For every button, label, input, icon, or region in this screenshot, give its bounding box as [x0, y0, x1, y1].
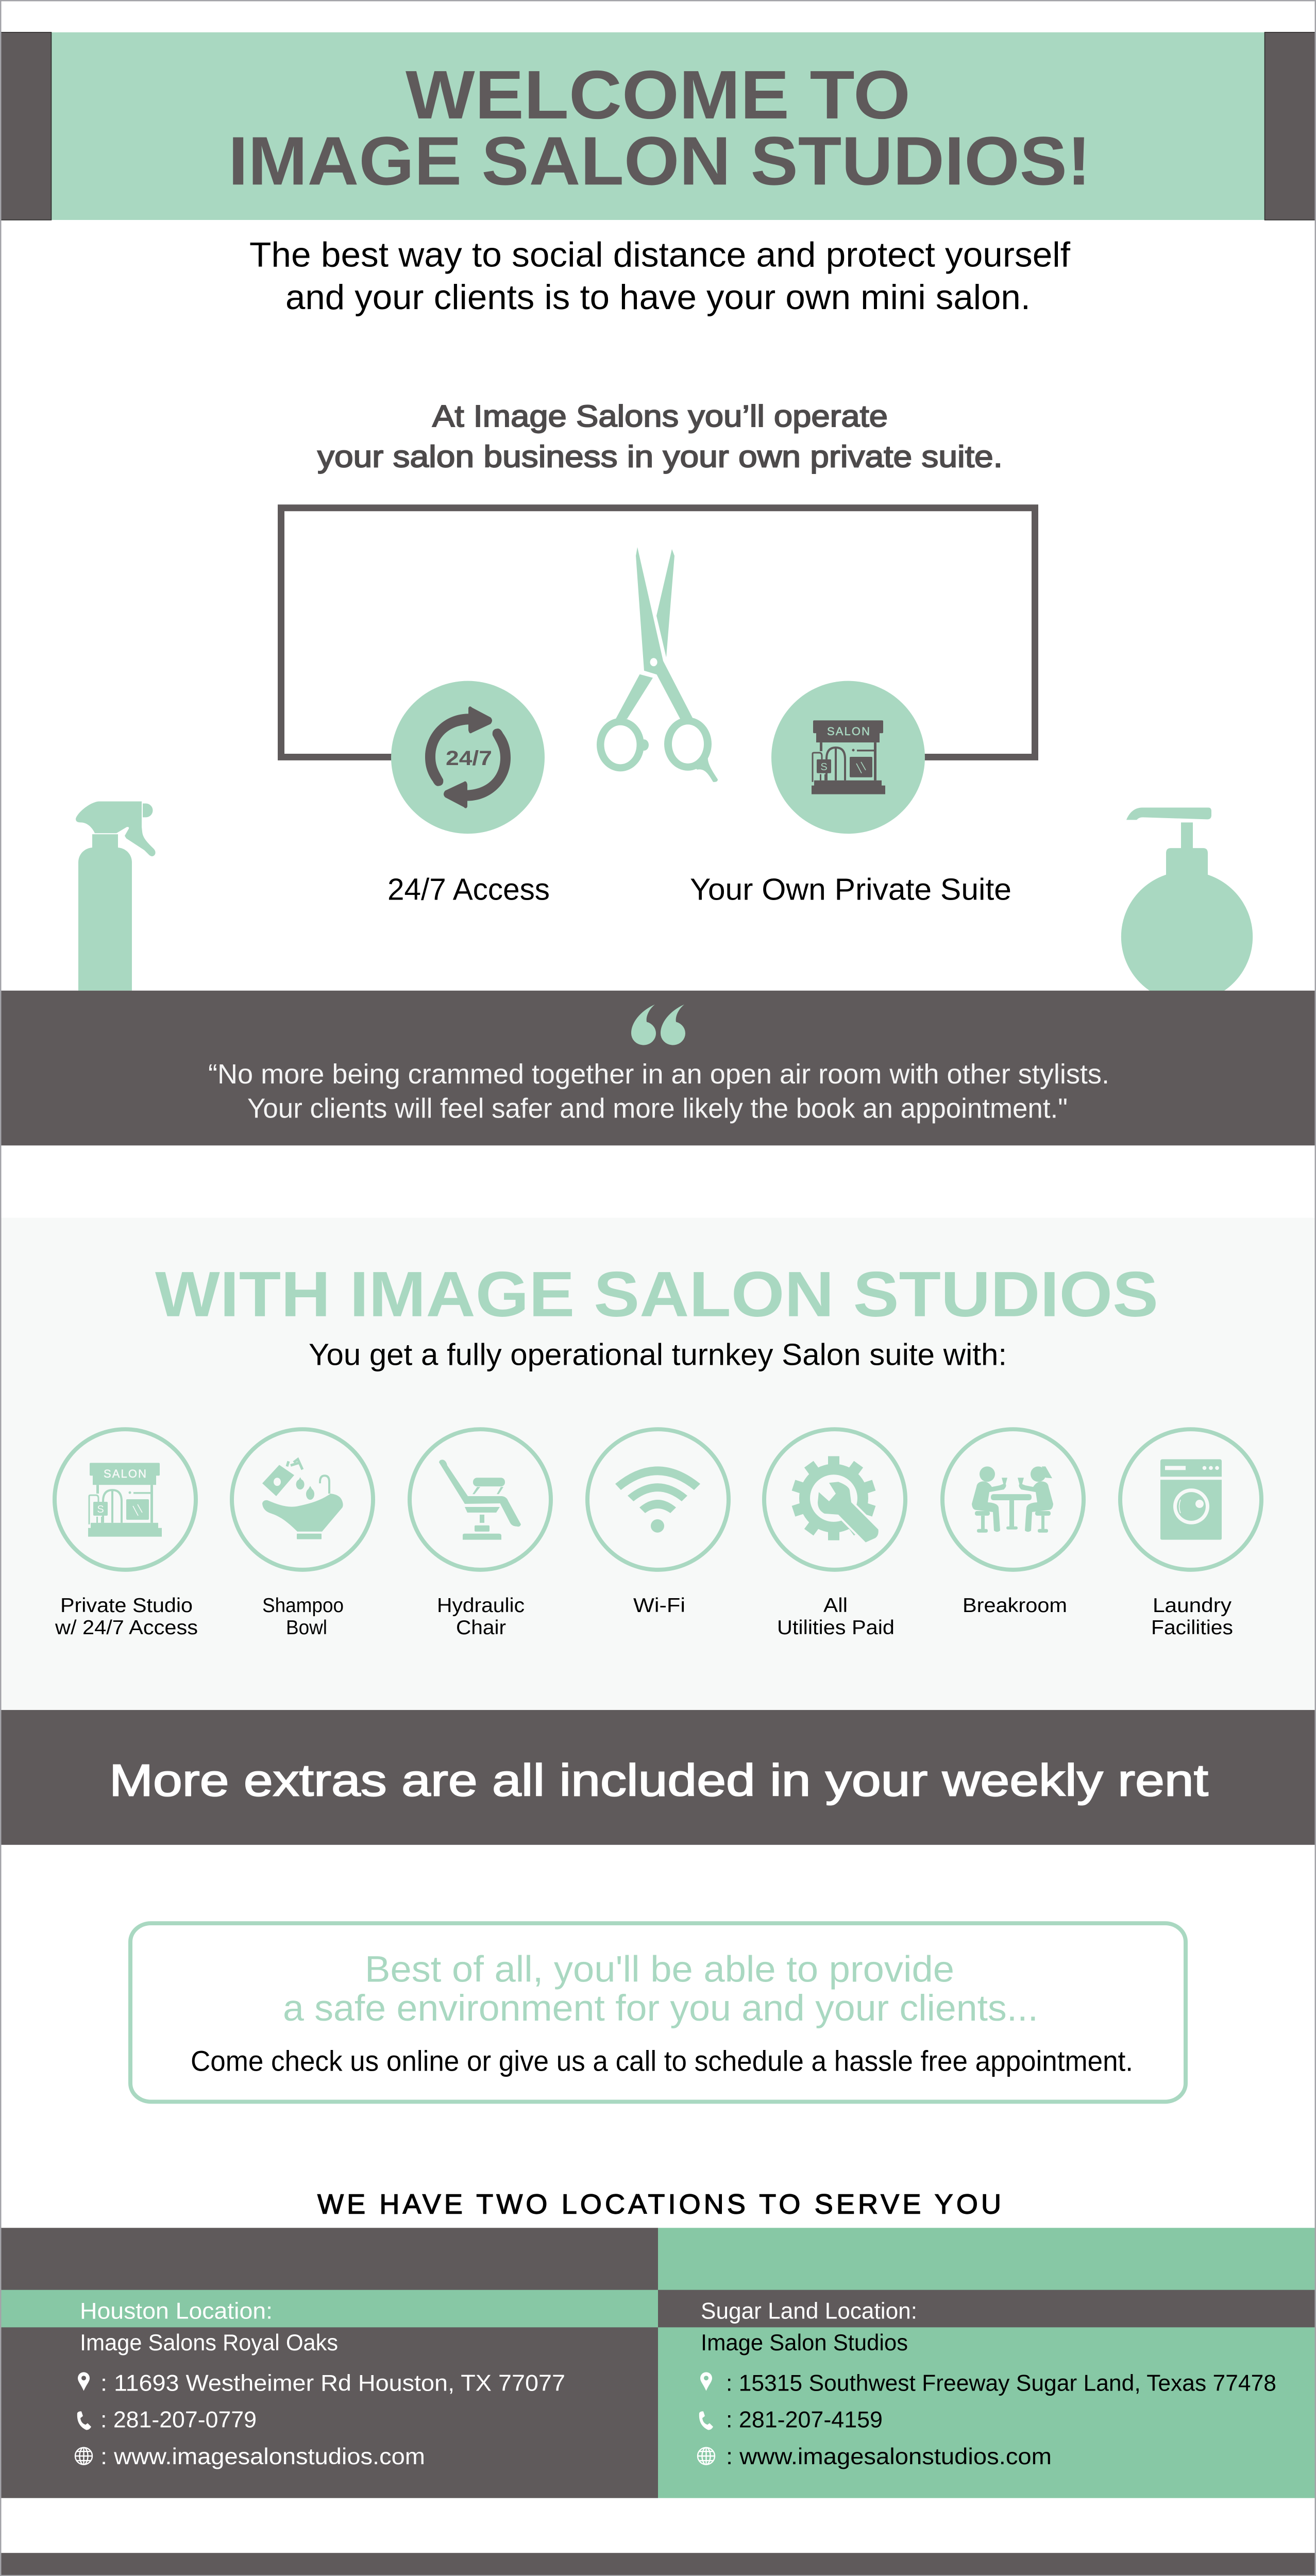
panel: sugar land location: : www.imagesalonstudios.com	[726, 2443, 1052, 2469]
amenity: hydraulic chair: Chair	[456, 1617, 506, 1639]
suite feature labels	[387, 872, 1011, 907]
title: IMAGE SALON STUDIOS!	[228, 123, 1091, 199]
amenity: shampoo bowl	[232, 1429, 373, 1639]
intro text: The best way to social distance and protect yourself	[249, 236, 1070, 274]
panel: sugar land location: : 15315 Southwest Freeway Sugar Land, Texas 77478	[726, 2370, 1276, 2396]
amenity: laundry facilities: Facilities	[1151, 1617, 1233, 1639]
amenity: hydraulic chair: Hydraulic	[437, 1595, 525, 1617]
panel: sugar land location	[658, 2228, 1316, 2498]
footer band	[0, 2553, 1316, 2575]
mirror frame	[281, 508, 1035, 757]
private suite heading	[317, 399, 1003, 474]
icon: quotation mark	[631, 1005, 685, 1045]
subheading: You get a fully operational turnkey Salon suite with:	[309, 1337, 1007, 1371]
icon: pin	[78, 2372, 90, 2391]
icon: phone	[699, 2411, 713, 2430]
amenity: private studio: SALON	[104, 1467, 146, 1480]
amenity: private studio: w/ 24/7 Access	[55, 1617, 198, 1639]
icon: private suite storefront: SALON	[827, 725, 870, 738]
amenity: private studio: S	[97, 1504, 104, 1515]
amenity: all utilities paid: All	[823, 1595, 848, 1617]
panel: houston location	[0, 2228, 658, 2498]
panel: houston location: : 11693 Westheimer Rd Houston, TX 77077	[100, 2370, 565, 2396]
intro text	[249, 236, 1070, 317]
private suite heading: At Image Salons you’ll operate	[432, 399, 888, 433]
title	[228, 57, 1091, 199]
amenity: all utilities paid: Utilities Paid	[777, 1617, 895, 1639]
panel: houston location: : 281-207-0779	[100, 2406, 257, 2432]
intro text: and your clients is to have your own mini salon.	[285, 278, 1031, 317]
panel: houston location: : www.imagesalonstudios.com	[100, 2443, 425, 2469]
amenity: shampoo bowl: Shampoo	[262, 1595, 344, 1617]
suite feature labels: Your Own Private Suite	[690, 872, 1011, 907]
panel: extras band	[0, 1710, 1316, 1845]
heading: WITH IMAGE SALON STUDIOS	[155, 1259, 1158, 1330]
icon: soap dispenser	[1121, 807, 1253, 1002]
quote text	[208, 1059, 1109, 1124]
callout: best of all	[130, 1923, 1186, 2102]
icon: 24/7 access	[391, 681, 545, 834]
amenity: all utilities paid	[764, 1429, 905, 1639]
private suite heading: your salon business in your own private suite.	[317, 439, 1003, 474]
icon: 24/7 access: 24/7	[446, 747, 492, 770]
icon: scissors	[597, 547, 718, 782]
amenity: breakroom	[942, 1429, 1084, 1617]
amenity: laundry facilities: Laundry	[1153, 1595, 1232, 1617]
icon: private suite storefront: S	[820, 761, 828, 773]
quote text: “No more being crammed together in an open air room with other stylists.	[208, 1059, 1109, 1090]
amenity: private studio	[55, 1429, 198, 1639]
panel: with image salon studios	[0, 1218, 1316, 1710]
amenity: private studio: Private Studio	[60, 1595, 193, 1617]
icon: spray bottle	[76, 802, 156, 991]
panel: houston location: Houston Location:	[80, 2297, 273, 2324]
panel: sugar land location: Image Salon Studios	[701, 2329, 908, 2355]
callout: best of all: Come check us online or give us a call to schedule a hassle free appointment.	[191, 2045, 1133, 2077]
amenity: shampoo bowl: Bowl	[286, 1617, 327, 1639]
amenity: wi-fi: Wi-Fi	[633, 1595, 685, 1617]
callout: best of all: a safe environment for you and your clients...	[283, 1988, 1038, 2029]
panel: sugar land location: : 281-207-4159	[726, 2406, 883, 2432]
locations heading: WE HAVE TWO LOCATIONS TO SERVE YOU	[317, 2189, 1001, 2219]
suite feature labels: 24/7 Access	[387, 872, 550, 907]
icon: private suite storefront	[771, 681, 925, 834]
amenity: laundry facilities	[1120, 1429, 1261, 1639]
panel: sugar land location: Sugar Land Location:	[701, 2297, 917, 2324]
amenity: wi-fi	[587, 1429, 729, 1617]
panel: extras band: More extras are all included in your weekly rent	[109, 1755, 1208, 1805]
icon: globe	[75, 2448, 92, 2465]
icon: pin	[700, 2372, 712, 2391]
quote text: Your clients will feel safer and more likely the book an appointment."	[247, 1093, 1068, 1124]
title: WELCOME TO	[406, 57, 910, 133]
panel: houston location: Image Salons Royal Oaks	[80, 2329, 338, 2355]
amenity: breakroom: Breakroom	[963, 1595, 1067, 1617]
panel: testimonial quote band	[0, 991, 1316, 1145]
callout: best of all: Best of all, you'll be able to provide	[365, 1949, 954, 1990]
amenity: hydraulic chair	[410, 1429, 551, 1639]
icon: globe	[698, 2448, 715, 2465]
icon: phone	[77, 2411, 91, 2430]
header banner	[0, 32, 1316, 220]
